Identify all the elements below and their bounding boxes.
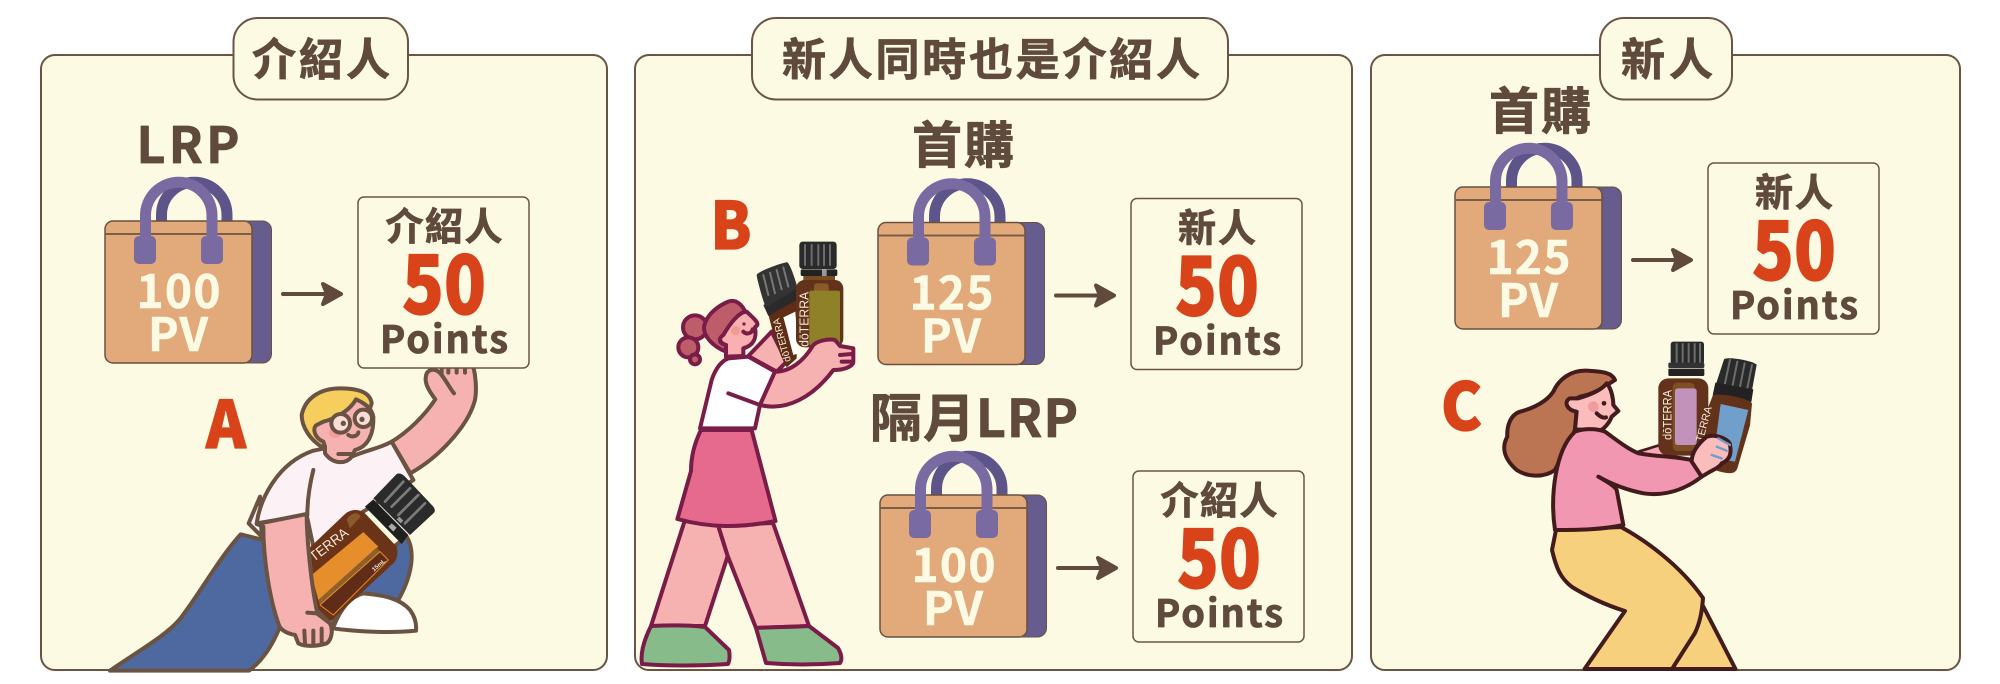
purchase flow: first purchase 125 PV to new member 50 points — [1455, 148, 1879, 334]
result box: 新人 — [1178, 198, 1256, 252]
icon: shopping bag — [878, 184, 1044, 366]
heading tab: 新人同時也是介紹人: 新人同時也是介紹人 — [782, 24, 1200, 88]
icon: shopping bag: PV — [921, 300, 982, 366]
result box — [1131, 198, 1302, 370]
arrow — [1056, 286, 1114, 306]
icon: shopping bag: PV — [923, 573, 984, 639]
lower body — [642, 430, 841, 666]
upper body — [678, 242, 853, 428]
result box: 介紹人 — [1160, 470, 1278, 525]
icon: blue-label bottle: TERRA — [1694, 404, 1715, 443]
result box: 50 — [1752, 188, 1836, 304]
icon: tilted bottle — [757, 262, 799, 367]
panel: new member who is also a referrer B — [635, 18, 1352, 670]
heading tab: 介紹人: 介紹人 — [252, 24, 390, 88]
heading: 首購: 首購 — [912, 106, 1014, 178]
heading: LRP: LRP — [136, 106, 240, 178]
purchase flow: first purchase 125 PV to new member 50 points — [878, 184, 1302, 370]
icon: shopping bag: PV — [1498, 265, 1559, 331]
result box: Points — [380, 309, 508, 364]
result box: Points — [1155, 583, 1283, 638]
arrow — [1633, 250, 1691, 270]
result box: Points — [1153, 310, 1281, 366]
icon: purple-label bottle: dōTERRA — [1661, 390, 1675, 440]
panel: new member C — [1371, 18, 1960, 670]
icon: orange bottle: 15mL — [371, 558, 388, 573]
icon: shopping bag: 125 — [1486, 222, 1570, 288]
icon: upright bottle — [796, 242, 843, 347]
upper body — [1504, 342, 1757, 530]
heading: 首購: 首購 — [1489, 72, 1591, 144]
icon: shopping bag: 125 — [910, 258, 994, 324]
icon: orange bottle: TERRA — [306, 524, 352, 565]
result box — [358, 196, 529, 368]
icon: tilted bottle: dōTERRA — [771, 317, 794, 363]
purchase flow: LRP 100 PV to referrer 50 points — [105, 182, 529, 368]
icon: shopping bag: 100 — [136, 256, 220, 322]
result box: 50 — [1175, 224, 1259, 340]
trousers — [1552, 527, 1736, 669]
label: C: C — [1441, 355, 1482, 449]
heading tab: 新人 — [1600, 18, 1732, 100]
heading: 隔月LRP: 隔月LRP — [870, 377, 1078, 452]
illustration: man with bottle — [110, 367, 476, 671]
illustration: woman with bottles — [1504, 342, 1757, 669]
arrow — [1058, 558, 1116, 578]
icon: blue-label bottle — [1694, 358, 1757, 473]
arrow — [283, 284, 341, 304]
label: B: B — [710, 174, 752, 268]
icon: orange bottle — [306, 473, 435, 622]
heading tab: 新人同時也是介紹人 — [752, 18, 1228, 100]
result box — [1708, 162, 1879, 334]
result box: Points — [1730, 275, 1858, 330]
result box: 介紹人 — [386, 196, 502, 251]
purchase flow: alternate month LRP 100 PV to referrer 50 points — [880, 456, 1304, 642]
heading tab: 新人: 新人 — [1621, 24, 1713, 88]
icon: upright bottle: dōTERRA — [797, 292, 812, 347]
icon: shopping bag: PV — [148, 299, 209, 365]
result box: 50 — [1177, 496, 1261, 612]
result box: 新人 — [1755, 162, 1833, 217]
illustration: woman with two bottles — [642, 242, 853, 665]
result box: 50 — [402, 222, 486, 338]
label: A: A — [205, 373, 247, 467]
result box — [1133, 470, 1304, 642]
panel: referrer A — [41, 18, 607, 671]
icon: shopping bag — [105, 182, 272, 365]
icon: purple-label bottle — [1658, 342, 1708, 456]
icon: shopping bag — [880, 456, 1046, 639]
icon: shopping bag: 100 — [912, 530, 996, 596]
icon: shopping bag — [1455, 148, 1622, 331]
heading tab: 介紹人 — [234, 18, 408, 100]
